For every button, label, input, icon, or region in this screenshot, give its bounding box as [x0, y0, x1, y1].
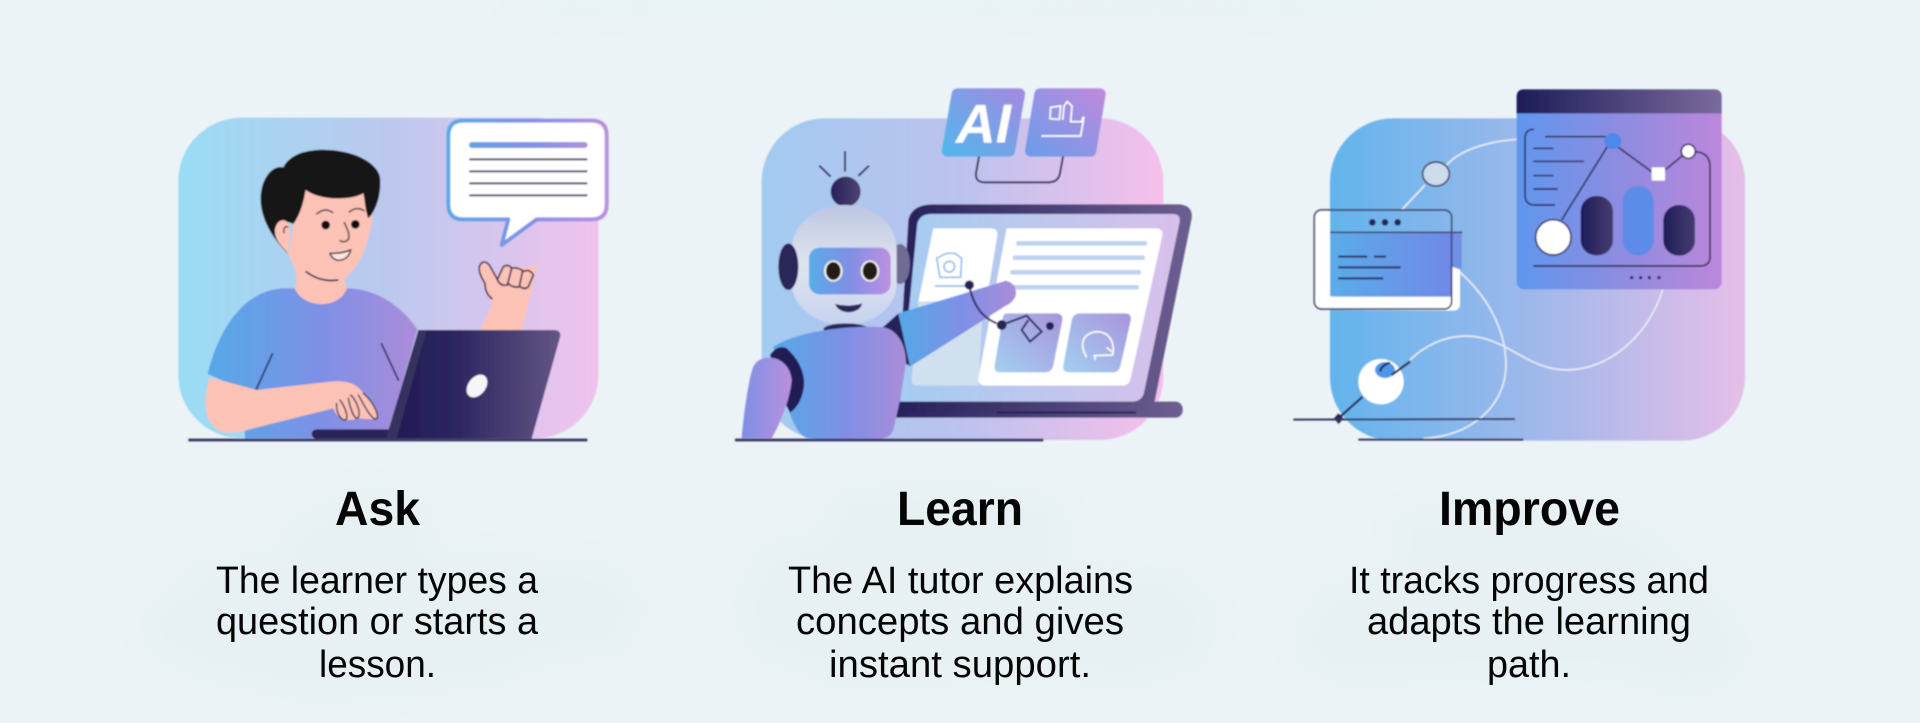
- raised hand: [479, 262, 537, 331]
- robot right ear: [890, 244, 910, 284]
- text block: Improve description: path.: [1487, 644, 1571, 686]
- sleeve creases: [256, 343, 399, 390]
- ground line: [188, 436, 587, 444]
- robot head: [778, 205, 897, 325]
- heading: Improve: Improve: [1439, 483, 1620, 536]
- robot pointing arm: [898, 281, 1016, 367]
- browser window: [1314, 210, 1462, 311]
- illustration: AI tutor robot: [735, 93, 1192, 440]
- speech bubble: [448, 121, 607, 245]
- panel: improve gradient backdrop: [1330, 118, 1745, 441]
- text block: Learn description: The AI tutor explains: [788, 560, 1133, 602]
- node circle: [1423, 162, 1449, 186]
- text block: Ask description: [216, 560, 539, 686]
- panel: ask gradient backdrop: [178, 118, 598, 438]
- ground lines: [1293, 419, 1523, 440]
- text block: Ask description: lesson.: [319, 644, 436, 686]
- heading: Ask: Ask: [335, 483, 420, 536]
- illustration: learner at laptop: [178, 118, 607, 440]
- robot torso: [773, 327, 906, 438]
- robot left arm: [742, 358, 792, 438]
- text block: Improve description: adapts the learning: [1367, 601, 1691, 643]
- connector between AI cards: [976, 155, 1063, 182]
- panel: learn gradient backdrop: [762, 118, 1163, 440]
- ground line: [735, 436, 1043, 444]
- dashboard: [1517, 89, 1722, 289]
- text block: Learn description: [788, 560, 1133, 686]
- progress curves: [1402, 139, 1663, 438]
- cursor target: [1334, 359, 1410, 424]
- heading: Learn: Learn: [897, 483, 1023, 536]
- robot antenna: [819, 151, 869, 207]
- robot neck: [823, 323, 869, 335]
- text block: Improve description: [1349, 560, 1709, 686]
- head: [261, 150, 380, 304]
- arm and hand: [205, 377, 377, 433]
- pointer path: [965, 280, 1054, 342]
- robot shoulder band: [770, 347, 804, 413]
- text block: Ask description: The learner types a: [216, 560, 539, 602]
- illustration: progress analytics: [1293, 89, 1745, 441]
- AI badge: AI: [954, 93, 1013, 155]
- robot shoulder joint: [883, 313, 911, 367]
- text block: Improve description: It tracks progress and: [1349, 560, 1709, 602]
- shirt: [208, 288, 417, 438]
- laptop: [312, 330, 560, 439]
- text block: Learn description: concepts and gives: [796, 601, 1124, 643]
- icon card: [1031, 94, 1100, 151]
- text block: Ask description: question or starts a: [216, 601, 539, 643]
- laptop with lesson screen: [887, 204, 1192, 418]
- text block: Learn description: instant support.: [829, 644, 1091, 686]
